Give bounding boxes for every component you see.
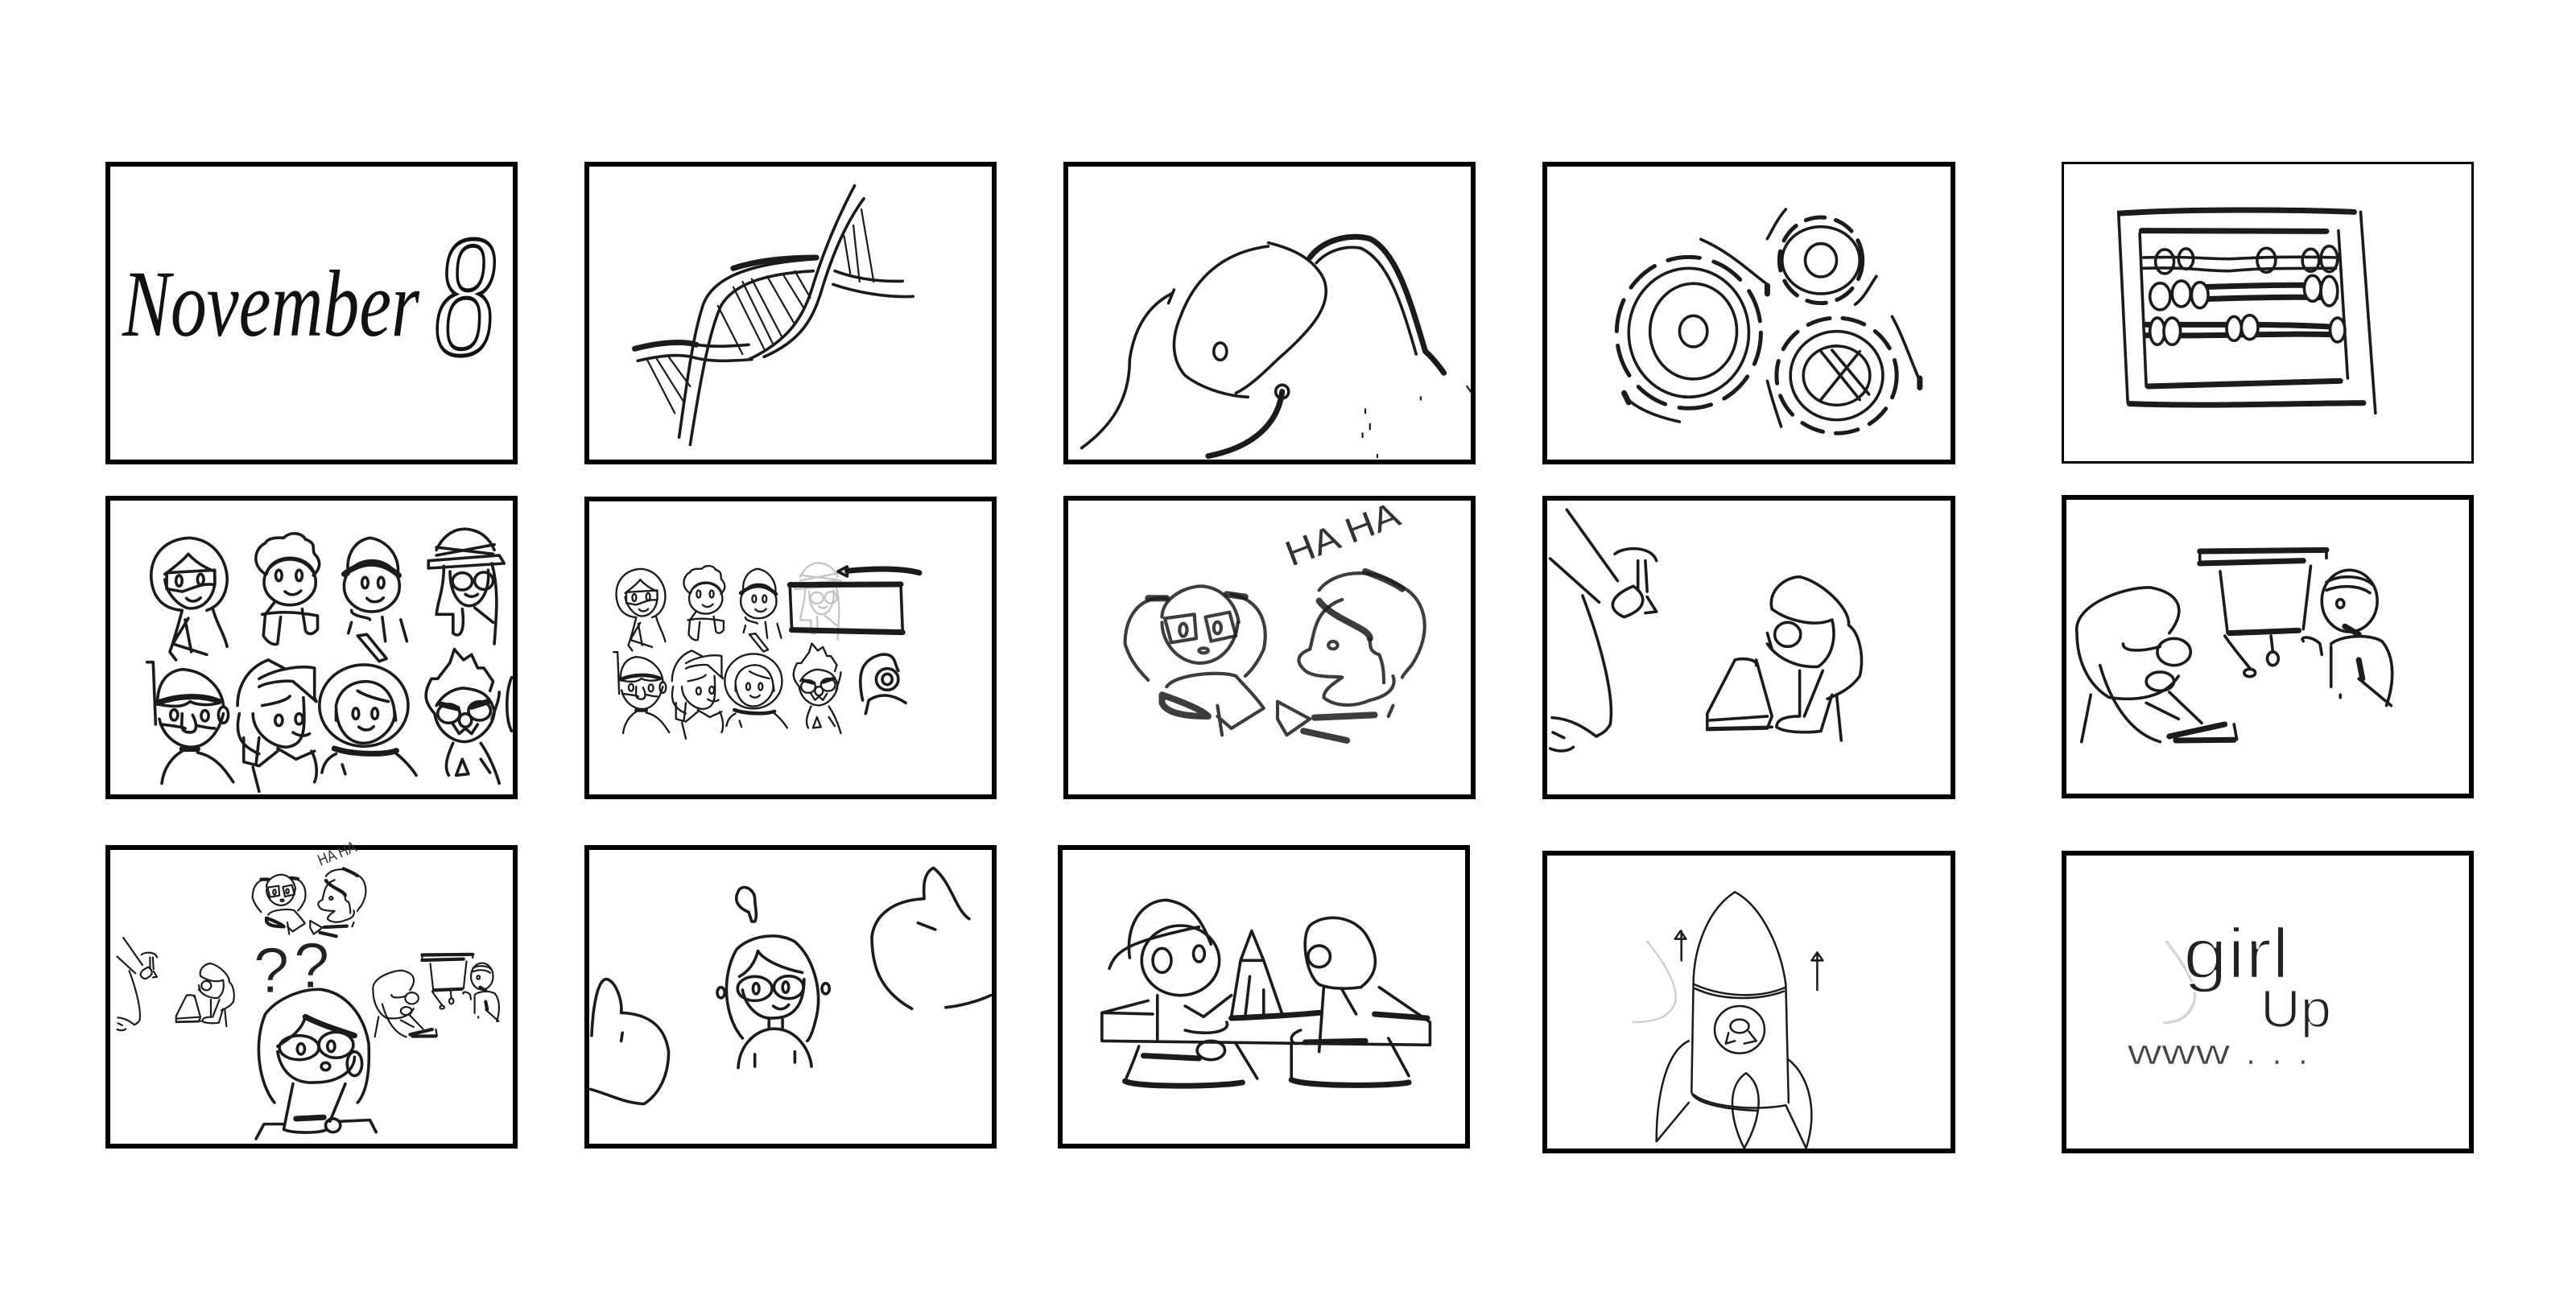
icon: DNA double helix: [634, 186, 913, 445]
frame: [108, 848, 515, 1146]
frame: [587, 164, 994, 462]
illustration: crew, box and arrow: [613, 563, 919, 739]
panel: girl up website closing card: [2064, 853, 2471, 1151]
illustration: girl with laptop: [1550, 509, 1861, 751]
website url: www: [2127, 1033, 2230, 1072]
frame: [1545, 164, 1953, 462]
frame: [2064, 853, 2471, 1151]
panel: abacus: [2062, 163, 2473, 462]
question marks: ?: [254, 934, 289, 1006]
panel: girl and boy laughing: [1066, 494, 1473, 797]
icon: three gears with arrows: [1616, 209, 1920, 433]
icon: abacus: [2119, 210, 2376, 413]
question marks: [254, 930, 329, 1006]
panel: smaller crew with highlighted box: [587, 499, 994, 797]
logo text: girl: girl: [2183, 914, 2289, 993]
handwritten date: November: [122, 251, 420, 357]
illustration: girl and three mini scenes: [117, 868, 499, 1139]
panel: idea and thumbs up: [587, 848, 994, 1146]
speech: laughter: HA HA: [1280, 494, 1406, 574]
illustration: girl and boy: [1125, 571, 1425, 740]
panel: confused girl with memories: [108, 838, 515, 1146]
frame: [1545, 498, 1953, 797]
illustration: eight characters: [147, 529, 512, 791]
handwritten date: [122, 200, 496, 392]
frame: [108, 164, 515, 462]
panel: crew of professional characters: [108, 498, 515, 797]
panel: DNA helix: [587, 164, 994, 462]
frame: [1066, 164, 1473, 462]
panel: November 8 date title: [108, 164, 515, 462]
panel: gears: [1545, 164, 1953, 462]
question marks: ?: [294, 930, 329, 1001]
faded stroke: [2165, 942, 2195, 1023]
frame: [587, 848, 994, 1146]
handwritten date: 8: [435, 200, 496, 392]
frame: [108, 498, 515, 797]
panel: girl watching presentation: [2064, 497, 2471, 796]
logo text: Up: Up: [2260, 979, 2331, 1038]
frame: [1060, 848, 1468, 1146]
panel: girl at laptop and pointing hand: [1545, 498, 1953, 797]
illustration: girl, light bulb and thumbs: [590, 868, 991, 1104]
panel: computer mouse: [1066, 164, 1473, 462]
illustration: kids and model rocket: [1102, 900, 1430, 1086]
panel: rocket: [1545, 853, 1953, 1151]
frame: [587, 499, 994, 797]
illustration: presenter and board: [2077, 550, 2392, 742]
frame: [1066, 498, 1473, 797]
website url: . . .: [2246, 1033, 2308, 1072]
icon: rocket with up arrows: [1633, 892, 1823, 1149]
frame: [1545, 853, 1953, 1151]
panel: two kids building a rocket at a table: [1060, 848, 1468, 1146]
frame: [2064, 497, 2471, 796]
frame: [2062, 163, 2473, 462]
icon: mouse with cable and arrows: [1082, 237, 1472, 457]
speech: mini laughter: HA HA: [316, 838, 360, 870]
